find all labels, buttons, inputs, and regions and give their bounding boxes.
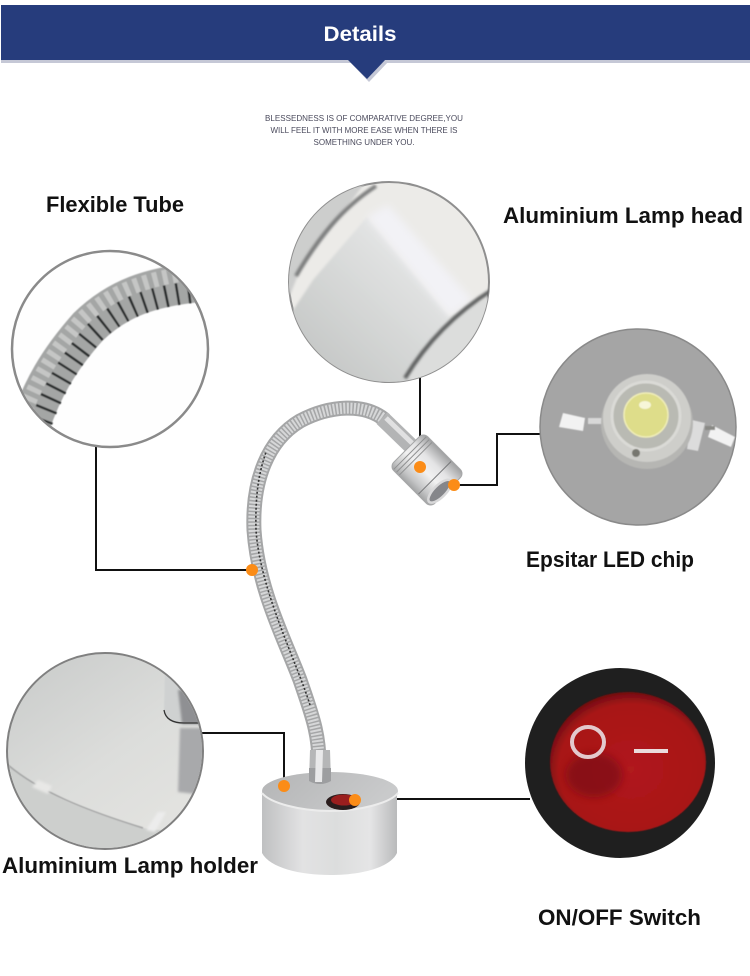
panel: lamp holder detail circle bbox=[0, 653, 205, 860]
panel: ON/OFF switch detail circle bbox=[525, 668, 715, 858]
panel: LED chip detail circle bbox=[540, 329, 736, 525]
tagline text: WILL FEEL IT WITH MORE EASE WHEN THERE IS bbox=[270, 126, 458, 135]
tagline text: SOMETHING UNDER YOU. bbox=[314, 138, 414, 147]
heading: Epsitar LED chip: Epsitar LED chip bbox=[526, 547, 694, 572]
flexible gooseneck tube bbox=[254, 408, 414, 770]
heading: Aluminium Lamp head: Aluminium Lamp head bbox=[503, 203, 743, 228]
lamp base bbox=[262, 750, 398, 875]
lamp product bbox=[254, 408, 465, 875]
panel: aluminium lamp head detail circle bbox=[280, 180, 492, 390]
tagline text bbox=[265, 114, 463, 147]
lamp head bbox=[390, 433, 465, 508]
heading: Flexible Tube: Flexible Tube bbox=[46, 192, 184, 217]
rocker switch on base bbox=[326, 794, 360, 810]
heading: Aluminium Lamp holder: Aluminium Lamp holder bbox=[2, 853, 258, 878]
tagline text: BLESSEDNESS IS OF COMPARATIVE DEGREE,YOU bbox=[265, 114, 463, 123]
heading: Details: Details bbox=[324, 23, 396, 46]
header banner bbox=[1, 5, 750, 82]
connector lines bbox=[96, 378, 540, 799]
callout dots bbox=[246, 461, 460, 806]
heading: ON/OFF Switch: ON/OFF Switch bbox=[538, 905, 701, 930]
panel: flexible tube detail circle bbox=[12, 251, 208, 447]
O symbol bbox=[572, 727, 604, 757]
line symbol bbox=[634, 749, 668, 753]
